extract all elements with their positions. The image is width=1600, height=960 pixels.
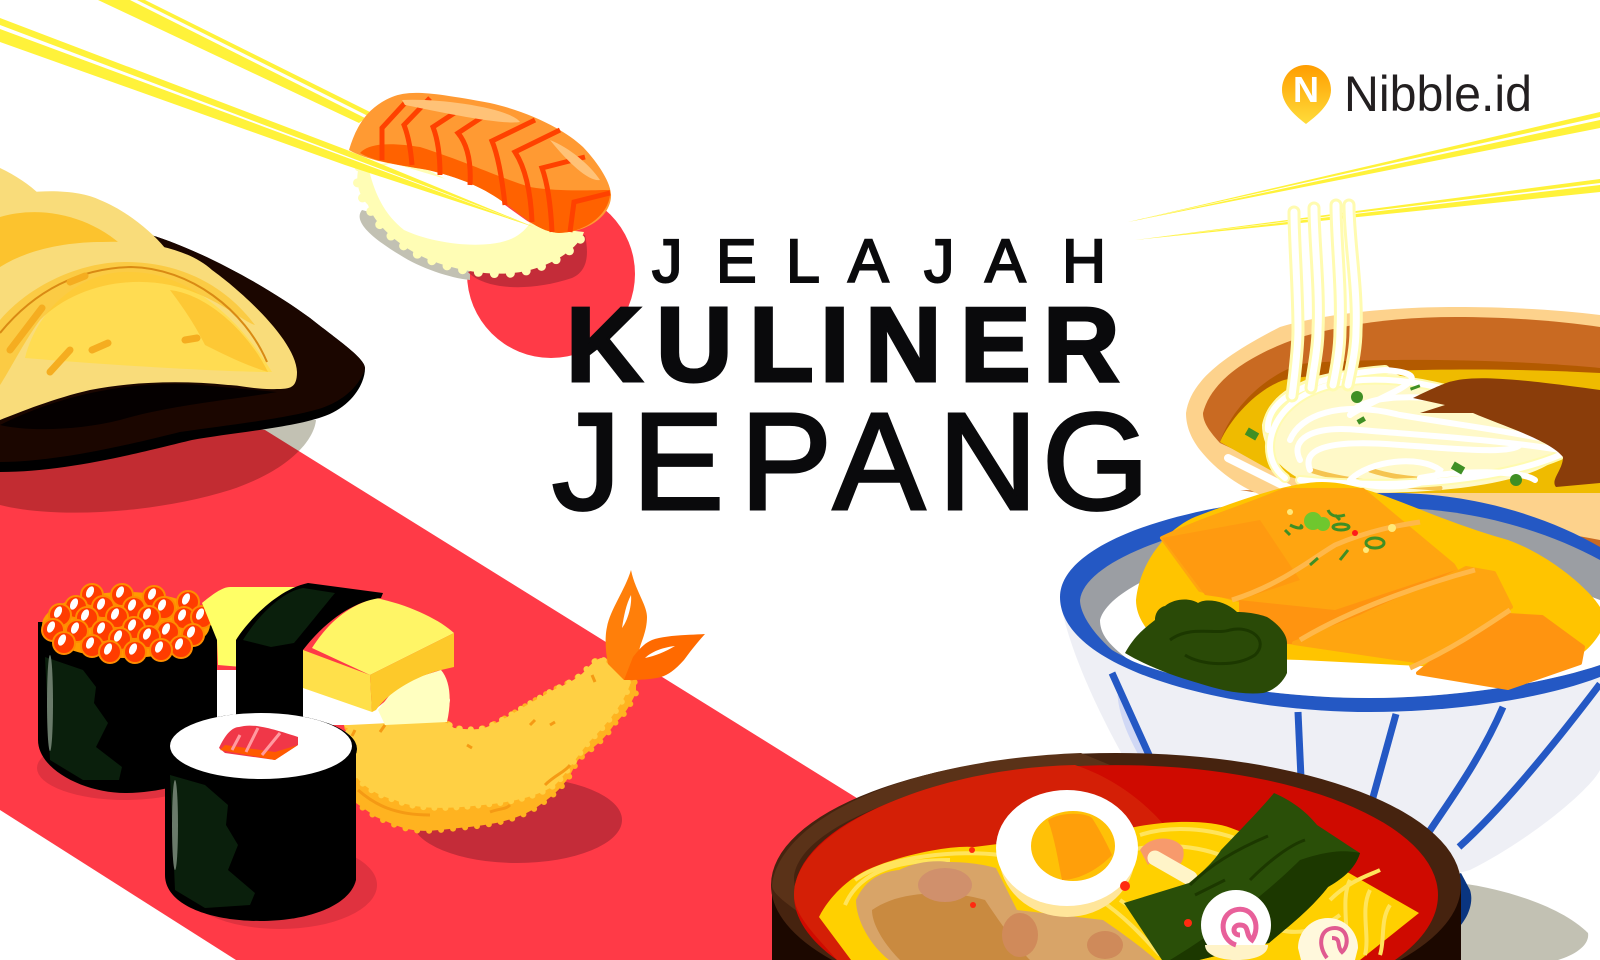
tuna filling <box>219 726 298 760</box>
tempura body <box>347 658 636 831</box>
rim highlight <box>1228 458 1288 488</box>
egg back <box>202 587 300 672</box>
salmon slice <box>349 93 611 233</box>
lower chopstick <box>0 18 534 227</box>
title line 2: KULINER <box>566 286 1120 404</box>
blue stripes <box>1112 673 1600 847</box>
plate of gyoza dumplings <box>0 168 365 472</box>
garnish herbs <box>1245 384 1522 486</box>
nori texture <box>170 775 255 908</box>
inner grey wall <box>1080 508 1600 698</box>
tail fin upper <box>606 570 647 680</box>
bowl inner <box>1203 317 1600 480</box>
noodle swirl <box>1262 368 1560 493</box>
mushroom <box>1140 838 1190 878</box>
logo N: N <box>1293 69 1319 110</box>
broth <box>1220 369 1600 493</box>
logo: Nibble.id <box>1282 65 1532 124</box>
rice <box>217 670 450 725</box>
rice inner white <box>369 163 530 245</box>
middle dumpling <box>0 191 165 320</box>
red table runner band <box>0 400 860 960</box>
pickled greens <box>1125 600 1287 693</box>
nori seaweed <box>1124 793 1360 960</box>
nori highlight <box>47 655 53 751</box>
nori wrap <box>165 748 356 921</box>
katsu cutlet <box>1162 490 1583 688</box>
nori texture <box>45 657 122 780</box>
pork chashu <box>856 861 1156 960</box>
left chopsticks <box>98 0 372 123</box>
blue rim <box>1060 493 1600 712</box>
udon noodle bowl <box>1186 205 1600 552</box>
halved egg <box>996 790 1138 917</box>
ikura gunkan sushi <box>38 584 217 793</box>
shrimp shadow <box>412 777 622 863</box>
back dumpling <box>0 168 40 240</box>
red sun circle <box>467 190 635 358</box>
egg front <box>303 650 372 712</box>
title <box>552 227 1149 539</box>
nori wrap <box>38 622 217 793</box>
salmon nigiri sushi <box>0 18 611 287</box>
salmon roe <box>42 584 213 663</box>
bowl body <box>772 885 1461 960</box>
right chopsticks <box>1128 112 1600 240</box>
bowl foot <box>1445 873 1471 935</box>
front dumpling <box>0 242 297 420</box>
narutomaki <box>1201 890 1358 960</box>
rice shadow grey <box>360 210 470 280</box>
title line 1: JELAJAH <box>652 227 1106 295</box>
nori highlight <box>172 780 178 870</box>
red bowl interior <box>794 765 1438 960</box>
top rim <box>165 713 357 785</box>
ebi tempura <box>347 570 705 831</box>
egg layer <box>1136 482 1600 667</box>
black plate <box>0 230 365 472</box>
inner shadow <box>1220 360 1600 480</box>
rice <box>357 163 584 274</box>
ramen bowl shadow <box>1456 883 1588 960</box>
noodles <box>819 822 1419 960</box>
tail fin right <box>624 634 705 680</box>
tuna hosomaki roll <box>165 713 357 921</box>
tempura crust marks <box>352 675 595 815</box>
bowl rim <box>1186 307 1600 540</box>
front roll shadow <box>183 841 377 929</box>
rice top <box>170 713 352 779</box>
egg top <box>312 598 454 675</box>
bowl rim <box>771 753 1461 960</box>
broth dots <box>969 847 1192 927</box>
logo wordmark: Nibble.id <box>1344 66 1532 122</box>
pale highlight <box>1120 695 1165 785</box>
dumpling crease <box>0 267 267 362</box>
beef slices <box>1413 378 1600 487</box>
title line 3: JEPANG <box>552 385 1149 539</box>
hanging noodles <box>1292 205 1356 396</box>
plate shadow <box>0 420 316 513</box>
garnish spring onion <box>1285 509 1396 565</box>
ramen bowl <box>771 753 1461 960</box>
egg side <box>370 633 454 712</box>
rice shadow red <box>468 235 587 287</box>
nori band <box>236 583 383 717</box>
katsudon bowl <box>1060 482 1600 880</box>
rice <box>1100 500 1600 698</box>
logo pin icon <box>1282 65 1331 124</box>
ikura roll shadow <box>37 736 213 800</box>
bowl outer base <box>1240 490 1600 552</box>
tamago nigiri sushi <box>202 583 454 725</box>
bowl body <box>1062 600 1600 880</box>
